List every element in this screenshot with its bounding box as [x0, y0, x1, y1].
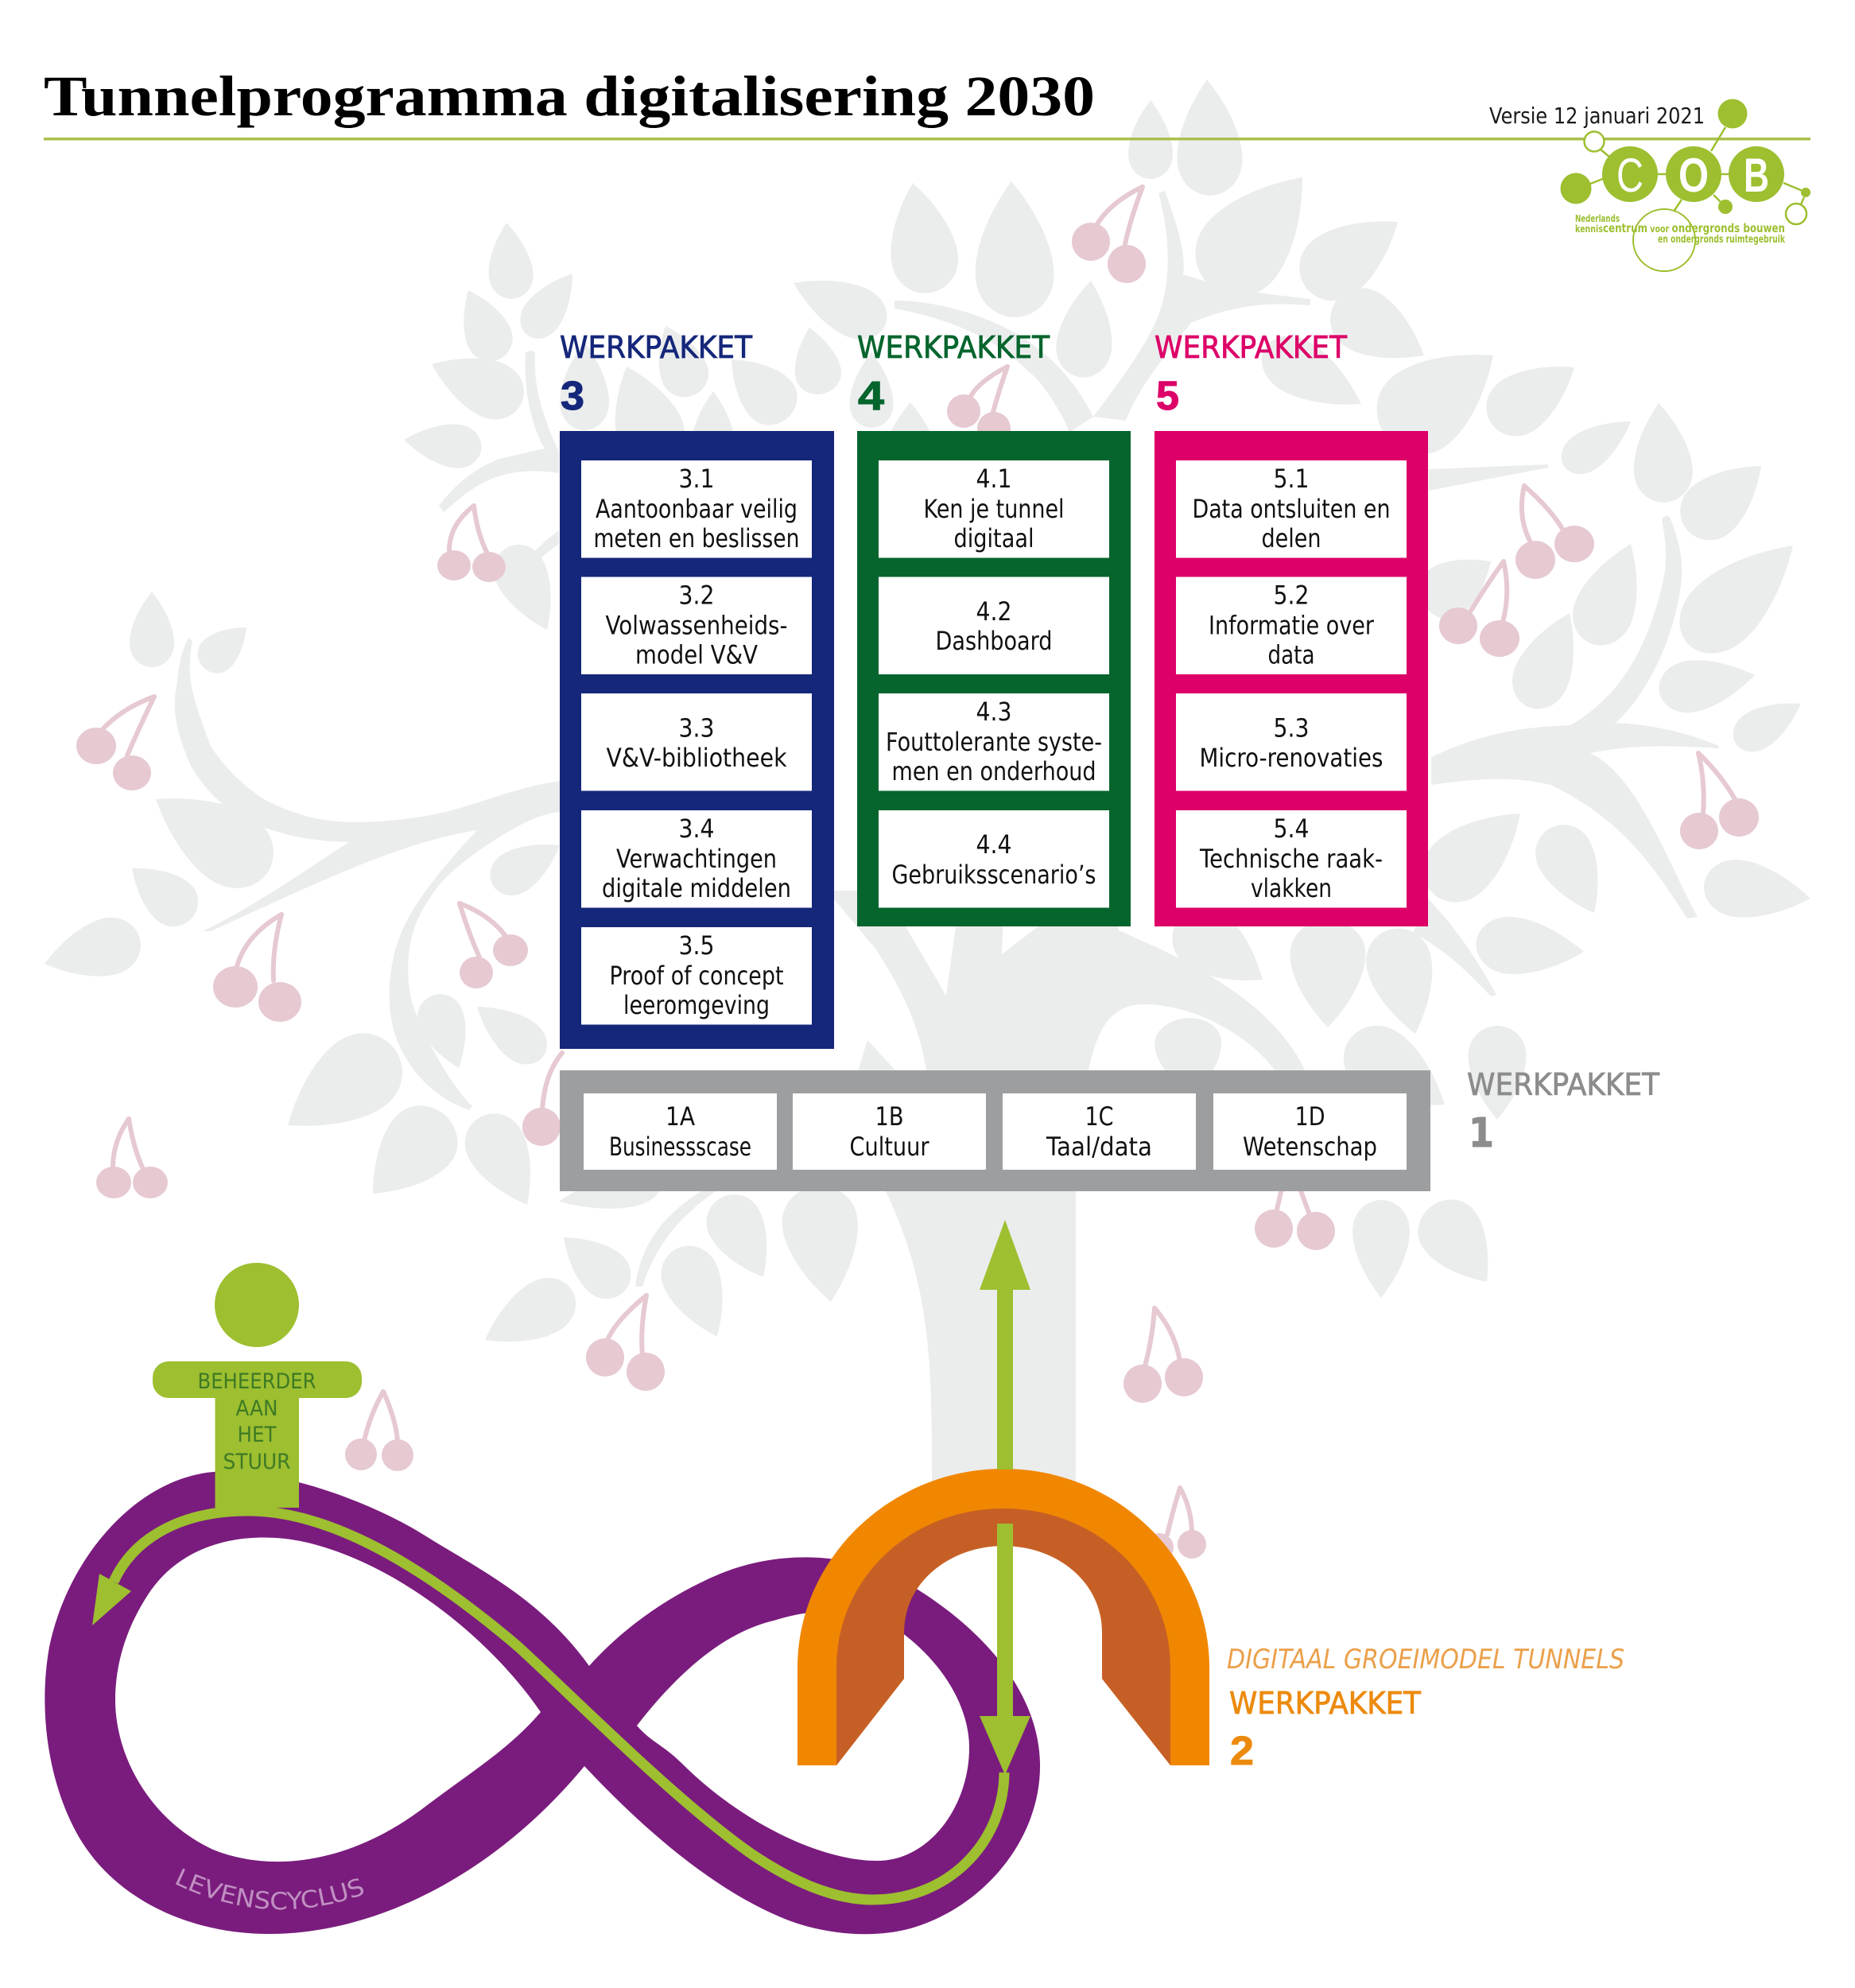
- COB logo: B: [1744, 149, 1769, 202]
- COB logo: Nederlands: [1575, 213, 1620, 224]
- heading: werkpakket 2: 2: [1230, 1728, 1254, 1773]
- tunnel arch: werkpakket 2: [797, 1469, 1209, 1765]
- panel: werkpakket 3: Aantoonbaar veilig: [596, 494, 797, 524]
- panel: werkpakket 5: [1155, 431, 1428, 926]
- panel: werkpakket 3: model V&V: [635, 639, 758, 670]
- heading: werkpakket 5: WERKPAKKET: [1155, 330, 1348, 365]
- panel: werkpakket 4: 4.3: [976, 697, 1011, 727]
- arrow: green route along the loop: [92, 1511, 1004, 1900]
- panel: werkpakket 3: 3.5: [679, 930, 714, 961]
- panel: werkpakket 3: Proof of concept: [609, 961, 784, 991]
- panel: werkpakket 5: Micro-renovaties: [1199, 743, 1383, 773]
- panel: werkpakket 1: Wetenschap: [1243, 1132, 1377, 1162]
- panel: werkpakket 4: Dashboard: [935, 626, 1053, 656]
- panel: werkpakket 1: [560, 1070, 1430, 1191]
- label: levenscyclus: LEVENSCYCLUS: [176, 1869, 363, 1910]
- arrow: down to the loop: [980, 1524, 1030, 1775]
- COB logo: en ondergronds ruimtegebruik: [1658, 234, 1785, 246]
- panel: werkpakket 5: 5.4: [1274, 813, 1309, 844]
- panel: werkpakket 1: Taal/data: [1046, 1132, 1152, 1162]
- panel: werkpakket 1: 1B: [875, 1101, 903, 1132]
- COB logo: kenniscentrum voor ondergronds bouwen: [1575, 221, 1785, 235]
- panel: werkpakket 4: digitaal: [954, 523, 1034, 553]
- panel: werkpakket 5: Technische raak-: [1199, 844, 1383, 874]
- heading: werkpakket 4: WERKPAKKET: [857, 330, 1050, 365]
- panel: werkpakket 3: [560, 431, 834, 1049]
- heading: werkpakket 4: [857, 330, 1050, 418]
- heading: werkpakket 1: 1: [1469, 1110, 1494, 1157]
- panel: werkpakket 4: 4.2: [976, 596, 1011, 627]
- infinity loop: levenscyclus: [45, 1471, 1040, 1934]
- panel: werkpakket 5: Informatie over: [1209, 611, 1375, 641]
- panel: werkpakket 4: Fouttolerante syste-: [886, 727, 1102, 757]
- panel: werkpakket 3: 3.4: [679, 813, 714, 844]
- panel: werkpakket 3: V&V-bibliotheek: [606, 743, 787, 773]
- panel: werkpakket 1: 1C: [1085, 1101, 1113, 1132]
- heading: werkpakket 2: DIGITAAL GROEIMODEL TUNNELS: [1227, 1644, 1624, 1675]
- heading: werkpakket 5: 5: [1156, 373, 1179, 418]
- panel: werkpakket 3: leeromgeving: [623, 990, 770, 1020]
- panel: werkpakket 5: vlakken: [1251, 873, 1332, 903]
- panel: werkpakket 5: 5.2: [1274, 580, 1309, 611]
- panel: werkpakket 3: 3.2: [679, 580, 714, 611]
- panel: werkpakket 3: 3.3: [679, 712, 714, 743]
- panel: werkpakket 3: 3.1: [679, 464, 714, 494]
- figure: beheerder aan het stuur: BEHEERDER: [197, 1369, 316, 1394]
- panel: werkpakket 3: Volwassenheids-: [606, 611, 787, 641]
- panel: werkpakket 3: Verwachtingen: [616, 844, 777, 874]
- heading: werkpakket 3: [560, 330, 753, 418]
- panel: werkpakket 4: men en onderhoud: [892, 756, 1096, 786]
- version date: Versie 12 januari 2021: [1489, 103, 1705, 129]
- title rule: [44, 138, 1810, 140]
- heading: werkpakket 4: 4: [858, 373, 885, 418]
- arrow: up to werkpakket 1: [980, 1220, 1030, 1470]
- background tree: [37, 79, 1818, 1487]
- COB logo: C: [1616, 149, 1643, 202]
- title: Tunnelprogramma digitalisering 2030: [44, 64, 1095, 128]
- panel: werkpakket 5: Data ontsluiten en: [1193, 494, 1390, 524]
- panel: werkpakket 5: data: [1267, 639, 1315, 670]
- heading: werkpakket 1: WERKPAKKET: [1467, 1067, 1660, 1102]
- tree leaves: [37, 79, 1818, 1365]
- heading: werkpakket 2: WERKPAKKET: [1229, 1686, 1422, 1721]
- panel: werkpakket 1: Businessscase: [609, 1132, 751, 1162]
- panel: werkpakket 1: 1A: [666, 1101, 695, 1132]
- panel: werkpakket 5: delen: [1261, 523, 1321, 553]
- decorative cherries: [76, 187, 1759, 1562]
- panel: werkpakket 4: Gebruiksscenario’s: [892, 860, 1096, 890]
- panel: werkpakket 3: digitale middelen: [602, 873, 791, 903]
- heading: werkpakket 2: [1227, 1644, 1624, 1773]
- panel: werkpakket 5: 5.3: [1274, 712, 1309, 743]
- panel: werkpakket 5: 5.1: [1274, 464, 1309, 494]
- panel: werkpakket 4: [857, 431, 1131, 926]
- COB logo: O: [1678, 149, 1709, 202]
- panel: werkpakket 4: Ken je tunnel: [924, 494, 1064, 524]
- heading: werkpakket 1: [1467, 1067, 1660, 1157]
- heading: werkpakket 3: WERKPAKKET: [560, 330, 753, 365]
- COB logo: [1560, 99, 1810, 271]
- figure: beheerder aan het stuur: STUUR: [223, 1450, 291, 1474]
- panel: werkpakket 4: 4.1: [976, 464, 1011, 494]
- figure: beheerder aan het stuur: HET: [237, 1423, 277, 1447]
- panel: werkpakket 4: 4.4: [976, 829, 1011, 860]
- panel: werkpakket 1: Cultuur: [849, 1132, 929, 1162]
- figure: beheerder aan het stuur: AAN: [235, 1396, 278, 1421]
- panel: werkpakket 3: meten en beslissen: [593, 523, 800, 553]
- heading: werkpakket 3: 3: [561, 373, 584, 418]
- figure: beheerder aan het stuur: [153, 1263, 362, 1508]
- panel: werkpakket 1: 1D: [1294, 1101, 1325, 1132]
- tree trunk and branches: [175, 191, 1719, 1487]
- heading: werkpakket 5: [1155, 330, 1348, 418]
